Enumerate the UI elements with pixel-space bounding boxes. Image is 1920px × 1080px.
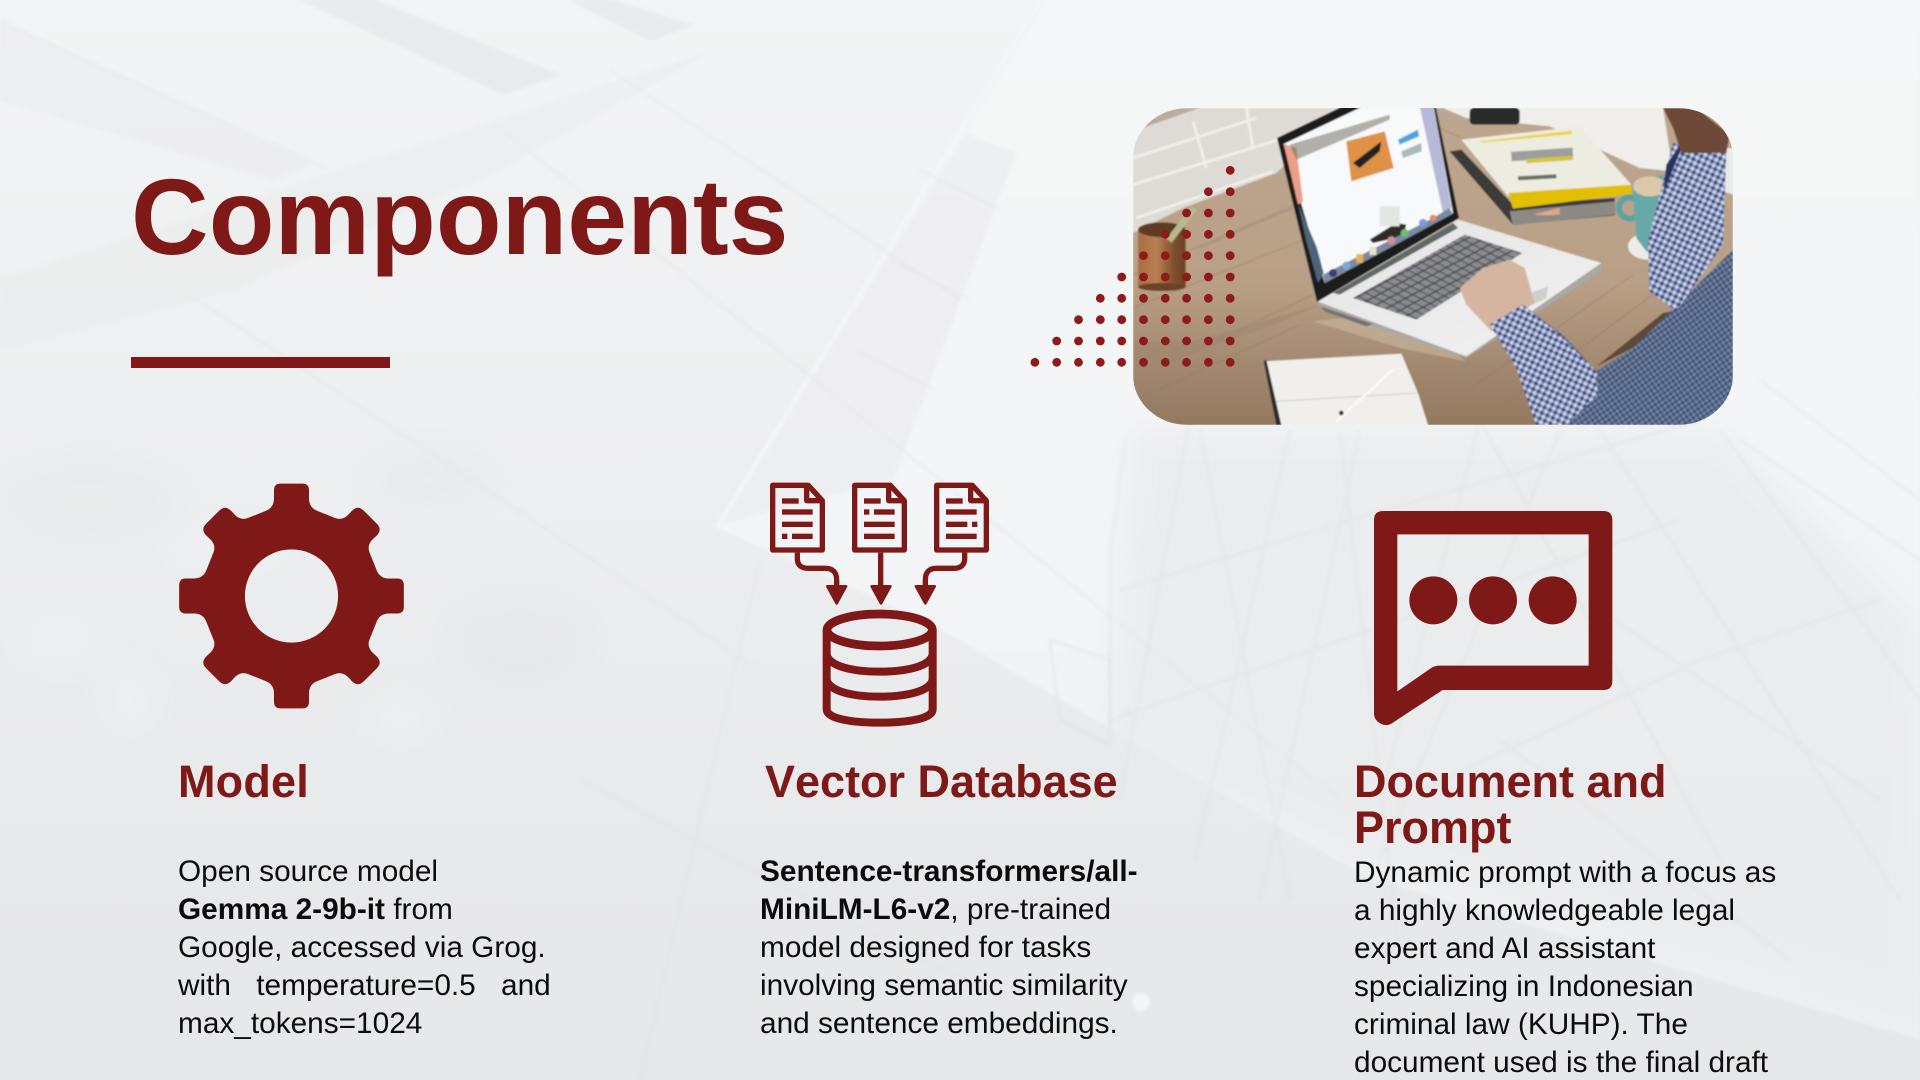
text: document and prompt description: a highly knowledgeable legal bbox=[1354, 894, 1735, 927]
heading: model: Model bbox=[178, 756, 309, 807]
text: vector database description: involving semantic similarity bbox=[760, 969, 1128, 1002]
text: document and prompt description: document used is the final draft bbox=[1354, 1046, 1768, 1079]
heading: document and prompt bbox=[1354, 756, 1667, 852]
text: model description: max_tokens=1024 bbox=[178, 1007, 422, 1040]
text: vector database description: and sentence embeddings. bbox=[760, 1007, 1118, 1040]
text: vector database description: MiniLM-L6-v2, pre-trained bbox=[760, 893, 1111, 926]
icon: speech bubble bbox=[1374, 511, 1612, 726]
notebook bbox=[1264, 354, 1428, 425]
text: vector database description bbox=[760, 855, 1138, 1040]
coffee cup bbox=[1627, 235, 1650, 260]
title: Components bbox=[131, 157, 788, 277]
shirt sleeve and torso bbox=[1526, 250, 1733, 425]
text: model description: with temperature=0.5 and bbox=[178, 969, 551, 1002]
text: model description: Google, accessed via Grog. bbox=[178, 931, 546, 964]
text: vector database description: Sentence-transformers/all- bbox=[760, 855, 1138, 888]
background behind the desk bbox=[1443, 108, 1673, 171]
icon: documents flowing into database bbox=[770, 482, 989, 727]
heading: document and prompt: Prompt bbox=[1354, 802, 1512, 852]
text: model description: Open source model bbox=[178, 855, 438, 888]
raised hand bbox=[1663, 108, 1730, 153]
wall bbox=[1133, 108, 1346, 233]
laptop base bbox=[1317, 220, 1601, 356]
text: vector database description: model designed for tasks bbox=[760, 931, 1091, 964]
photo: person working on a laptop at a wooden desk bbox=[1133, 108, 1733, 425]
wood grain bbox=[1134, 128, 1647, 304]
text: document and prompt description bbox=[1354, 856, 1776, 1079]
pencil cup bbox=[1138, 230, 1186, 287]
text: model description: Gemma 2-9b-it from bbox=[178, 893, 453, 926]
text: document and prompt description: Dynamic prompt with a focus as bbox=[1354, 856, 1776, 889]
laptop screen bbox=[1277, 101, 1459, 302]
heading: vector database: Vector Database bbox=[765, 756, 1118, 807]
keyboard bbox=[1353, 235, 1522, 320]
window lattice bbox=[1110, 380, 1920, 960]
hand on trackpad bbox=[1460, 260, 1535, 331]
stack of books bbox=[1450, 150, 1615, 225]
text: document and prompt description: expert and AI assistant bbox=[1354, 932, 1655, 965]
heading: document and prompt: Document and bbox=[1354, 756, 1667, 807]
text: document and prompt description: criminal law (KUHP). The bbox=[1354, 1008, 1688, 1041]
icon: gear bbox=[179, 484, 404, 708]
text: document and prompt description: specializing in Indonesian bbox=[1354, 970, 1694, 1003]
raised arm sleeve bbox=[1648, 143, 1726, 311]
title underline bbox=[131, 357, 390, 368]
text: model description bbox=[178, 855, 551, 1040]
